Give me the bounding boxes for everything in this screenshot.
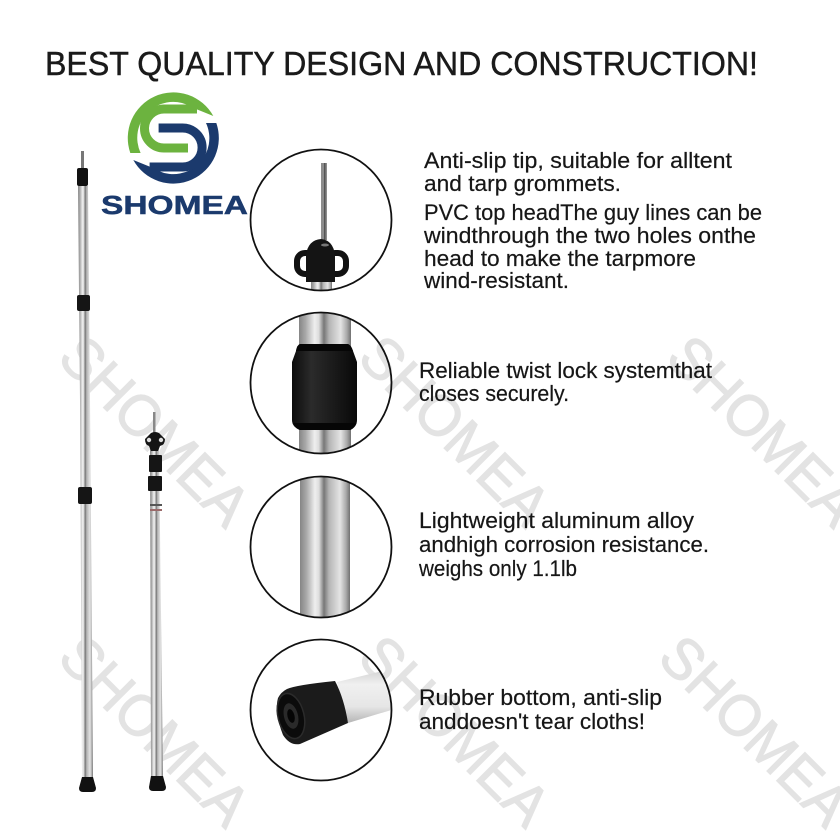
text: rubber bottom description: [419, 685, 662, 734]
text: aluminum description: [418, 508, 709, 581]
detail circle: tip and PVC head: [250, 150, 392, 294]
title: BEST QUALITY DESIGN AND CONSTRUCTION!: [45, 46, 758, 83]
tall pole: [77, 151, 96, 792]
text: rubber bottom description: anddoesn't tear cloths!: [419, 709, 645, 734]
text: aluminum description: weighs only 1.1lb: [418, 556, 577, 581]
text: aluminum description: Lightweight aluminum alloy: [419, 508, 695, 533]
text: rubber bottom description: Rubber bottom, anti-slip: [419, 685, 662, 710]
text: tip and head description: windthrough the two holes onthe: [423, 223, 756, 248]
text: twist lock description: closes securely.: [419, 381, 569, 406]
watermarks: SHOMEA: [347, 323, 563, 539]
text: twist lock description: Reliable twist lock systemthat: [419, 358, 713, 383]
logo: SHOMEA: [101, 92, 248, 220]
watermarks: [47, 323, 840, 836]
detail circle: aluminum tube: [250, 470, 392, 625]
text: tip and head description: head to make the tarpmore: [424, 246, 696, 271]
detail circle: twist lock: [250, 310, 392, 455]
text: tip and head description: [423, 148, 762, 293]
text: tip and head description: Anti-slip tip, suitable for alltent: [424, 148, 733, 173]
text: twist lock description: [419, 358, 713, 406]
watermarks: SHOMEA: [47, 323, 263, 539]
logo wordmark: SHOMEA: [101, 190, 248, 220]
short pole: [145, 412, 166, 791]
text: tip and head description: and tarp grommets.: [424, 171, 621, 196]
text: tip and head description: wind-resistant.: [423, 268, 569, 293]
logo mark: [128, 92, 219, 184]
detail circle: rubber bottom: [250, 640, 398, 780]
text: tip and head description: PVC top headThe guy lines can be: [424, 200, 762, 225]
text: aluminum description: andhigh corrosion resistance.: [419, 532, 709, 557]
